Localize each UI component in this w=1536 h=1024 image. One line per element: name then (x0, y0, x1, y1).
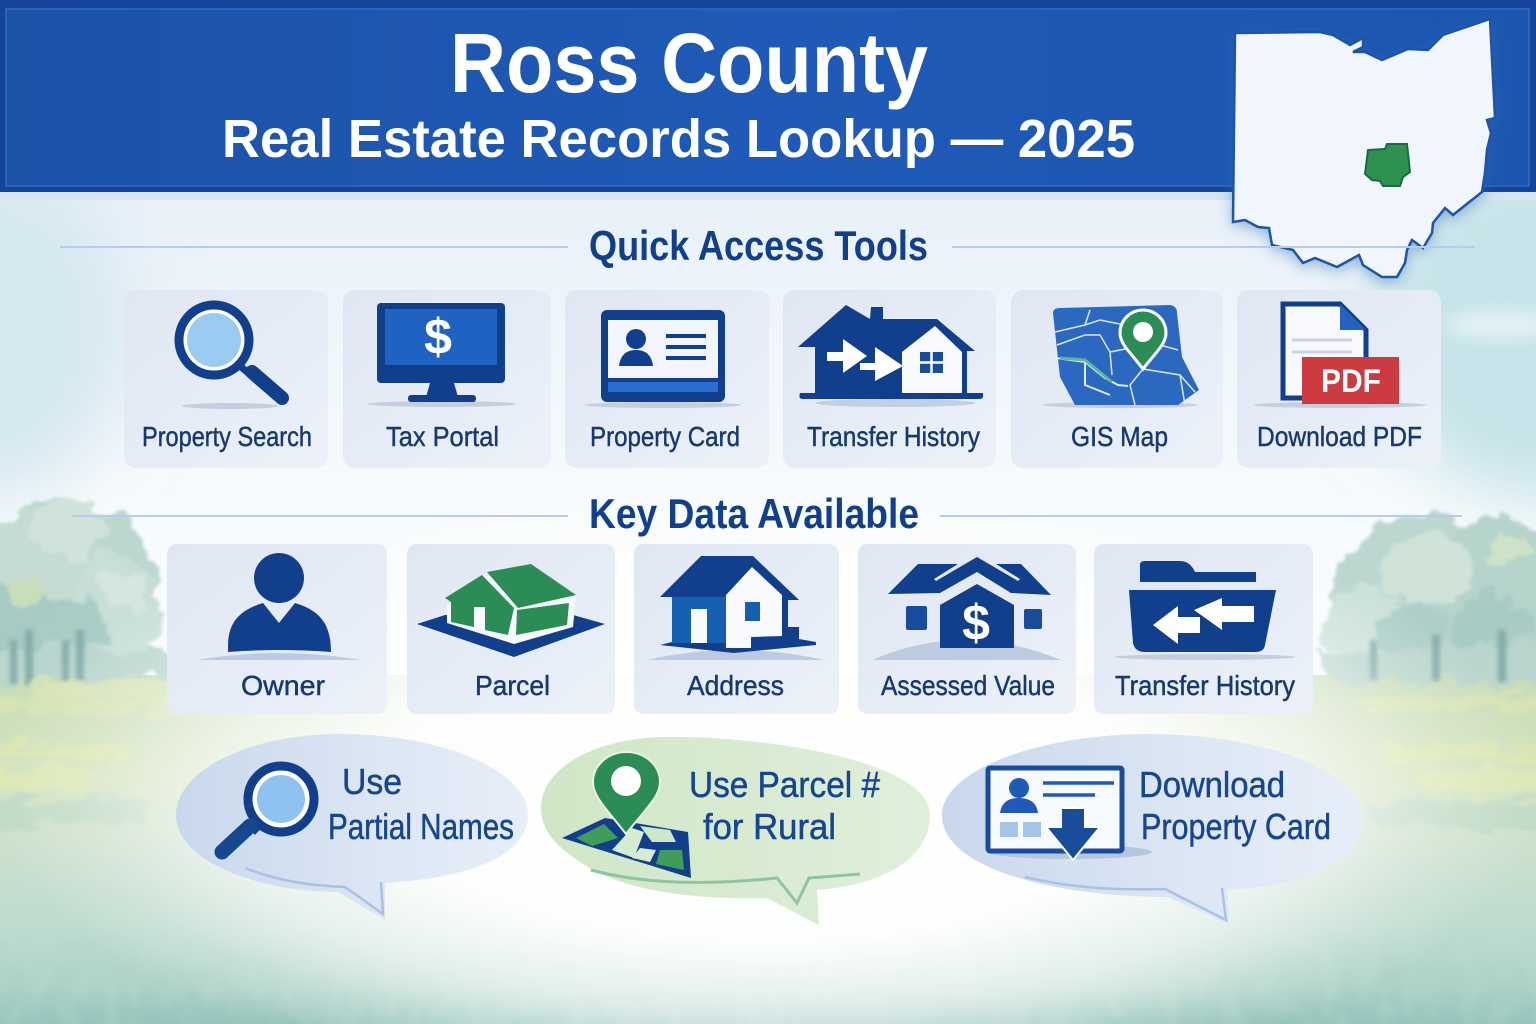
card: GIS Map: GIS Map (1071, 421, 1168, 452)
card: Tax Portal (343, 290, 551, 468)
card: Download PDF: PDF (1321, 363, 1381, 399)
Ross County highlight (1365, 144, 1410, 186)
tip bubble: Download Property Card: Property Card (1141, 806, 1331, 847)
card: Download PDF: Download PDF (1257, 421, 1422, 452)
card: Transfer History: Transfer History (807, 421, 980, 452)
tip bubble: Use Parcel # for Rural (541, 737, 930, 925)
card: Download PDF (1237, 290, 1441, 468)
card: Address (634, 544, 839, 714)
title: Ross County (450, 16, 928, 110)
card: Parcel (407, 544, 615, 714)
card: Property Search: Property Search (142, 421, 312, 452)
tip bubble: Use Partial Names: Use (342, 761, 402, 802)
card: Owner (167, 544, 387, 714)
subtitle: Real Estate Records Lookup — 2025 (222, 109, 1135, 169)
tip bubble: Use Parcel # for Rural: Use Parcel # (689, 764, 880, 805)
card: Assessed Value (858, 544, 1076, 714)
card: Parcel: Parcel (475, 670, 550, 701)
tip bubble: Use Partial Names (176, 734, 528, 920)
card: Address: Address (687, 670, 784, 701)
heading: Key Data Available: Key Data Available (589, 490, 919, 537)
card: Transfer History data: Transfer History (1115, 670, 1295, 701)
heading: Quick Access Tools: Quick Access Tools (589, 222, 928, 269)
tip bubble: Download Property Card (942, 734, 1363, 925)
card: Property Card (565, 290, 769, 468)
card: Transfer History data (1094, 544, 1313, 714)
card: Property Search (124, 290, 328, 468)
card: Property Card: Property Card (590, 421, 740, 452)
card: Transfer History (783, 290, 996, 468)
tip bubble: Download Property Card: Download (1139, 764, 1285, 805)
tip bubble: Use Parcel # for Rural: for Rural (703, 806, 836, 847)
header banner (0, 0, 1536, 200)
card: Assessed Value: $ (962, 595, 990, 651)
card: Tax Portal: $ (424, 309, 452, 365)
card: Assessed Value: Assessed Value (881, 670, 1055, 701)
tip bubble: Use Partial Names: Partial Names (328, 806, 514, 847)
card: Tax Portal: Tax Portal (386, 421, 499, 452)
Ohio map with Ross County (1233, 19, 1495, 277)
card: GIS Map (1011, 290, 1223, 468)
card: Owner: Owner (241, 670, 325, 701)
